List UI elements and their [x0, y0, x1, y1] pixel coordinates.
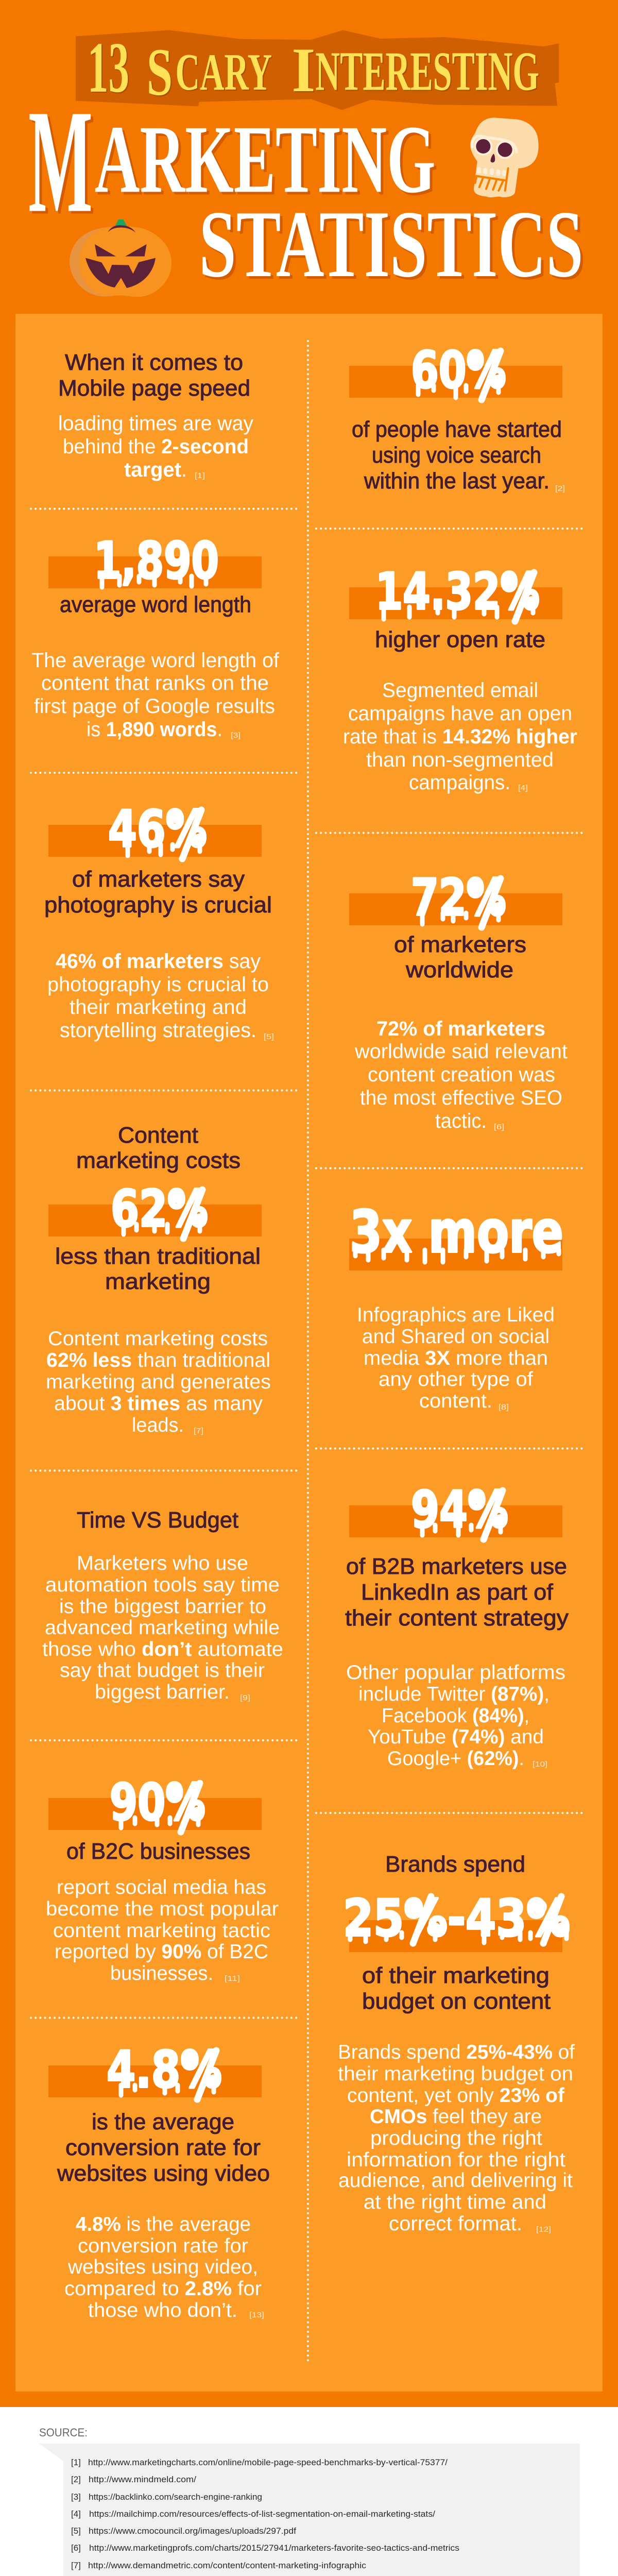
source list: https://mailchimp.com/resources/effects-of-list-segmentation-on-email-marketing-stats/ [89, 2509, 435, 2519]
body text [343, 679, 577, 794]
body text: those who don’t automate [42, 1638, 283, 1660]
title line 1 [88, 27, 539, 109]
body text: biggest barrier. [95, 1681, 230, 1703]
heading [394, 932, 526, 982]
body text: conversion rate for [78, 2235, 248, 2257]
body text: worldwide said relevant [354, 1040, 568, 1063]
heading: using voice search [372, 443, 541, 468]
body text: content that ranks on the [41, 672, 269, 694]
heading: worldwide [405, 957, 513, 982]
heading [57, 2109, 270, 2186]
body text: [12] [536, 2225, 551, 2234]
body text: any other type of [379, 1368, 533, 1391]
body text: CMOs feel they are [370, 2106, 542, 2128]
body text: campaigns have an open [348, 702, 572, 725]
stat: 62% content marketing costs [46, 1123, 271, 1436]
heading: Mobile page speed [58, 376, 250, 401]
source list: [2] [71, 2475, 81, 2484]
heading [345, 1554, 569, 1631]
heading: higher open rate [375, 627, 545, 652]
header [28, 27, 583, 297]
number band [48, 2041, 262, 2099]
stat: 25%-43% budget [338, 1852, 575, 2235]
body text: target. [124, 459, 187, 481]
body text: is 1,890 words. [87, 718, 222, 741]
body text: say that budget is their [60, 1659, 265, 1682]
heading above number: Content [118, 1123, 198, 1148]
body text [42, 1552, 283, 1703]
heading: of B2B marketers use [346, 1554, 567, 1579]
body text: Infographics are Liked [357, 1304, 555, 1326]
body text: [8] [499, 1403, 509, 1412]
heading: When it comes to [65, 350, 243, 375]
source list: [6] [71, 2543, 81, 2553]
number band [349, 1481, 562, 1539]
heading: their content strategy [345, 1605, 569, 1631]
heading [58, 350, 250, 401]
body text: loading times are way [58, 412, 253, 435]
heading: of marketers say [72, 867, 245, 892]
stat: 46% photography [44, 800, 274, 1042]
source list: [7] [71, 2561, 81, 2570]
sources [39, 2426, 580, 2576]
heading below number [55, 1244, 261, 1294]
heading: conversion rate for [65, 2135, 261, 2160]
icon: skull [470, 117, 539, 197]
body text: is the biggest barrier to [59, 1596, 266, 1618]
panel: statistics [15, 314, 603, 2392]
body text: advanced marketing while [45, 1617, 280, 1639]
body text [58, 412, 253, 481]
source list: http://www.demandmetric.com/content/content-marketing-infographic [88, 2561, 367, 2570]
body text: Facebook (84%), [382, 1705, 529, 1727]
number band: 3x more [350, 1199, 563, 1266]
number band: 62% [111, 1180, 208, 1239]
body text [46, 1328, 271, 1436]
number band: 60% [411, 341, 506, 400]
body text: 4.8% is the average [76, 2213, 251, 2235]
body text [31, 649, 280, 741]
source list: [4] [71, 2509, 81, 2519]
body text: tactic. [435, 1110, 487, 1132]
body text: report social media has [57, 1876, 266, 1899]
body text: than non-segmented [366, 749, 554, 771]
body text: reported by 90% of B2C [55, 1941, 268, 1963]
body text: marketing and generates [46, 1371, 271, 1393]
body text: [11] [225, 1974, 240, 1983]
source list: http://www.marketingprofs.com/charts/2015/27941/marketers-favorite-seo-tactics-and-metrics [89, 2543, 459, 2553]
body text: Brands spend 25%-43% of [338, 2041, 575, 2063]
number band [48, 1180, 262, 1239]
body text: content, yet only 23% of [347, 2084, 564, 2107]
body text: audience, and delivering it [338, 2170, 573, 2192]
source list: [1] [71, 2458, 81, 2467]
body text: media 3X more than [364, 1347, 548, 1369]
body text: Segmented email [382, 679, 538, 702]
number band [349, 341, 562, 400]
heading above number: Brands spend [385, 1852, 525, 1877]
body text [46, 1876, 279, 1985]
body text: correct format. [389, 2213, 522, 2235]
body text: include Twitter (87%), [358, 1683, 550, 1705]
heading: photography is crucial [44, 892, 272, 918]
body text: [10] [533, 1760, 547, 1769]
title line 1: S [147, 34, 173, 109]
body text: content creation was [368, 1063, 555, 1086]
body text: the most effective SEO [360, 1087, 562, 1109]
body text: Content marketing costs [48, 1328, 268, 1350]
body text: The average word length of [31, 649, 280, 672]
heading: websites using video [57, 2161, 270, 2186]
body text: leads. [132, 1414, 184, 1436]
body text: storytelling strategies. [60, 1019, 256, 1042]
heading: of marketers [394, 932, 526, 957]
body text: compared to 2.8% for [64, 2278, 262, 2300]
body text: [13] [249, 2311, 264, 2319]
body text: about 3 times as many [54, 1393, 263, 1415]
number band: 14.32% [375, 563, 540, 621]
body text: first page of Google results [34, 695, 275, 718]
stat: 72% SEO [349, 869, 568, 1132]
source list: http://www.marketingcharts.com/online/mobile-page-speed-benchmarks-by-vertical-75377/ [88, 2458, 448, 2467]
body text: behind the 2-second [63, 435, 249, 458]
body text: [3] [231, 731, 241, 740]
source list: [3] [71, 2492, 81, 2502]
body text: information for the right [347, 2149, 565, 2171]
heading below number: of their marketing [362, 1963, 550, 1988]
body text [338, 2041, 575, 2235]
title line 1: CARY [176, 43, 272, 101]
stat: time vs budget [42, 1507, 283, 1703]
heading: of people have started [352, 417, 562, 442]
heading: LinkedIn as part of [361, 1580, 554, 1605]
title banner [76, 30, 559, 110]
body text: Other popular platforms [346, 1662, 565, 1684]
body text: [9] [240, 1693, 250, 1702]
heading below number: less than traditional [55, 1244, 261, 1269]
stat: 1,890 word length [31, 532, 280, 741]
heading below number: budget on content [362, 1989, 551, 2014]
heading below number: marketing [105, 1269, 211, 1294]
body text [357, 1304, 555, 1412]
title line 2: marketing: M [28, 79, 93, 243]
number band [349, 869, 562, 927]
heading: of B2C businesses [66, 1839, 250, 1864]
body text: photography is crucial to [47, 973, 269, 996]
body text: their marketing and [70, 996, 247, 1019]
body text: rate that is 14.32% higher [343, 725, 577, 748]
stat: 90% B2C [46, 1773, 279, 1985]
heading: is the average [92, 2109, 234, 2134]
heading above number: marketing costs [76, 1148, 241, 1173]
body text [64, 2213, 264, 2321]
title line 1: 13 [88, 27, 129, 107]
heading above number [76, 1123, 241, 1173]
stat: 14.32% open rate [343, 563, 577, 794]
body text: 46% of marketers say [56, 950, 261, 973]
heading: Time VS Budget [77, 1507, 238, 1533]
number band: 46% [108, 800, 207, 859]
heading: within the last year. [364, 468, 550, 494]
body text: their marketing budget on [338, 2063, 573, 2085]
source list: https://www.cmocouncil.org/images/uploads/297.pdf [89, 2526, 296, 2536]
body text: businesses. [110, 1962, 213, 1985]
heading: average word length [60, 592, 251, 617]
heading below number [362, 1963, 551, 2014]
body text [346, 1662, 565, 1770]
body text: those who don’t. [88, 2299, 237, 2321]
body text: become the most popular [46, 1898, 279, 1920]
body text: Google+ (62%). [387, 1748, 524, 1770]
stat: 94% LinkedIn [345, 1481, 569, 1770]
source list: https://backlinko.com/search-engine-ranking [89, 2492, 262, 2502]
body text: campaigns. [409, 771, 510, 794]
body text: [6] [494, 1123, 504, 1131]
heading [352, 417, 565, 494]
title line 1: I [291, 35, 315, 105]
stat: mobile page speed [58, 350, 253, 481]
stat: 60% voice search [349, 341, 565, 494]
body text: Marketers who use [77, 1552, 248, 1574]
stat: 4.8% video [48, 2041, 270, 2321]
number band [48, 1773, 262, 1832]
body text: websites using video, [67, 2256, 258, 2278]
body text: 62% less than traditional [46, 1349, 270, 1371]
stat: 3x more infographics [349, 1199, 563, 1412]
sources box [39, 2444, 580, 2576]
sources heading: SOURCE: [39, 2426, 88, 2439]
number band: 1,890 [94, 532, 219, 590]
body text: at the right time and [364, 2191, 546, 2213]
body text [47, 950, 274, 1042]
body text: 72% of marketers [376, 1018, 545, 1040]
body text [354, 1018, 568, 1132]
number band: 94% [411, 1481, 508, 1539]
body text: [1] [195, 471, 205, 480]
number band: 72% [411, 869, 506, 927]
number band: 4.8% [107, 2041, 222, 2099]
body text: producing the right [370, 2127, 542, 2149]
icon: pumpkin [70, 219, 171, 297]
body text: [5] [264, 1032, 274, 1041]
body text: YouTube (74%) and [368, 1726, 544, 1748]
body text: [4] [518, 784, 528, 792]
column divider [31, 341, 586, 2363]
body text: [7] [194, 1427, 203, 1435]
heading [44, 867, 272, 918]
number band [48, 800, 262, 859]
title line 2: marketing [28, 79, 436, 243]
source list: [5] [71, 2526, 81, 2536]
body text: and Shared on social [362, 1326, 550, 1348]
source list [71, 2458, 542, 2576]
body text: automation tools say time [45, 1574, 280, 1596]
source list: http://www.mindmeld.com/ [89, 2475, 196, 2484]
heading: [2] [555, 484, 565, 493]
number band: 25%-43% [343, 1889, 570, 1948]
number band: 90% [110, 1773, 205, 1832]
body text: content. [419, 1390, 492, 1412]
body text: content marketing tactic [53, 1920, 270, 1942]
